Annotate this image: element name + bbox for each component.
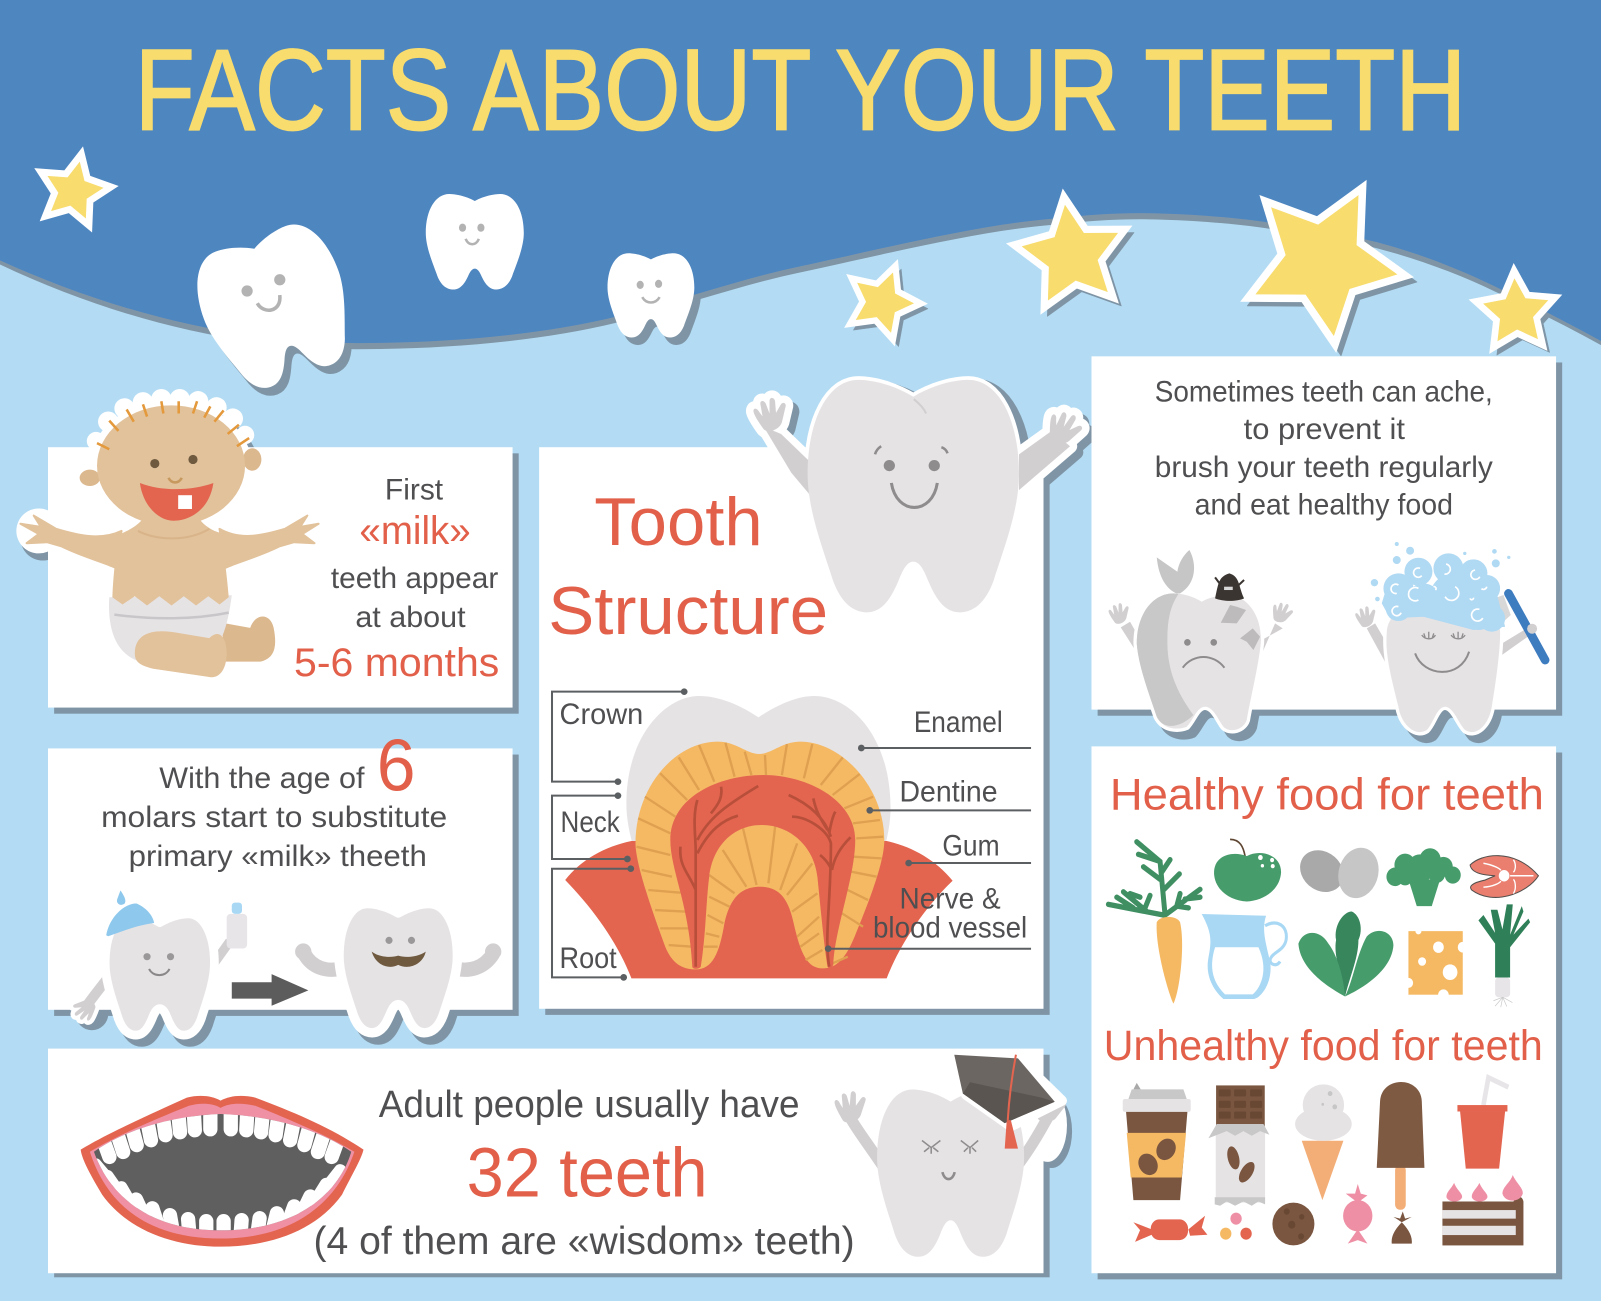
label: Root: Root [560,942,617,975]
text: 5-6 months: 5-6 months [294,641,499,685]
icon: chocolate [1208,1085,1269,1206]
icon: salmon [1470,856,1538,897]
icon: wrapped pink sweet [1343,1184,1372,1244]
icon: carrot [1108,842,1200,1004]
star 2 [837,253,930,344]
heading: Unhealthy food: Unhealthy food for teeth [1104,1022,1543,1070]
star 4 [1221,150,1433,359]
panel shadows [54,362,1562,1279]
icon: popsicle [1377,1082,1424,1210]
heading: Structure: Structure [548,574,828,649]
label: blood vessel: blood vessel [873,911,1027,944]
panel: food [1104,769,1544,1245]
text: brush your teeth regularly: brush your teeth regularly [1155,451,1493,484]
white panels [48,356,1556,1273]
heading: Tooth: Tooth [594,485,763,560]
text: Sometimes teeth can ache: Sometimes teeth can ache, [1155,375,1493,408]
arrow [232,974,308,1006]
text: With the age of: With the age of [159,762,365,795]
icon: coffee [1123,1083,1191,1200]
text: at about: at about [355,601,466,634]
icon: spinach [1298,911,1393,996]
icon: cake [1442,1175,1523,1245]
icon: eggs [1293,842,1385,904]
text: First: First [385,473,443,506]
text: and eat healthy food: and eat healthy food [1195,489,1453,522]
icon: cookie [1272,1203,1314,1245]
heading: Healthy food: Healthy food for teeth [1110,769,1544,820]
text: teeth appear: teeth appear [331,562,498,595]
text: to prevent it: to prevent it [1244,413,1405,446]
icon: milk jug [1202,914,1286,999]
panel: adult teeth [81,1055,1068,1263]
white tooth small [608,253,694,337]
adult tooth with moustache [295,904,501,1033]
label: Gum: Gum [942,830,1000,863]
label: Enamel: Enamel [914,706,1003,739]
icon: truffle [1392,1211,1412,1244]
panel: molars at age six [69,723,501,1035]
graduate tooth character [833,1055,1068,1257]
icon: broccoli [1386,848,1461,906]
icon: candy [1133,1216,1207,1242]
tooth cross-section diagram [552,688,1031,981]
text: 32 teeth: 32 teeth [467,1134,708,1212]
label: Nerve and: Nerve & [900,883,1001,916]
healthy food icons [1108,839,1538,1007]
icon: sweets [1220,1213,1252,1240]
waving tooth character [751,380,1085,612]
label: Crown: Crown [560,698,643,731]
icon: apple [1214,839,1281,901]
icon: ice cream [1295,1084,1352,1200]
icon: leek [1478,904,1530,1007]
stars [32,147,1558,359]
icon: soda cup [1457,1078,1508,1169]
panel: prevent toothache [1107,375,1545,732]
number 6: 6 [377,723,416,806]
text: primary milk teeth: primary «milk» theeth [129,840,427,873]
white tooth medium [426,194,524,289]
happy brushing tooth [1354,542,1545,732]
milk tooth character [69,890,247,1035]
panel: first milk teeth [16,389,499,685]
panel: tooth structure [548,380,1085,981]
text: milk: «milk» [359,509,471,553]
sad decayed tooth [1107,550,1295,730]
text: Adult people usually have: Adult people usually have [379,1084,799,1126]
label: Neck: Neck [561,806,620,839]
blue header wave [0,0,1601,349]
text: molars start to substitute: molars start to substitute [101,801,447,834]
mouth illustration [81,1091,363,1247]
star 5 [1474,269,1558,348]
label: Dentine: Dentine [900,776,998,809]
star 1 [32,147,116,228]
star 3 [1008,189,1134,311]
text: 4 of them are wisdom teeth: (4 of them are «wisdom» teeth) [313,1220,855,1263]
white tooth large [184,214,368,400]
baby illustration [16,389,319,677]
icon: cheese [1404,928,1468,1001]
unhealthy food icons [1123,1078,1523,1245]
